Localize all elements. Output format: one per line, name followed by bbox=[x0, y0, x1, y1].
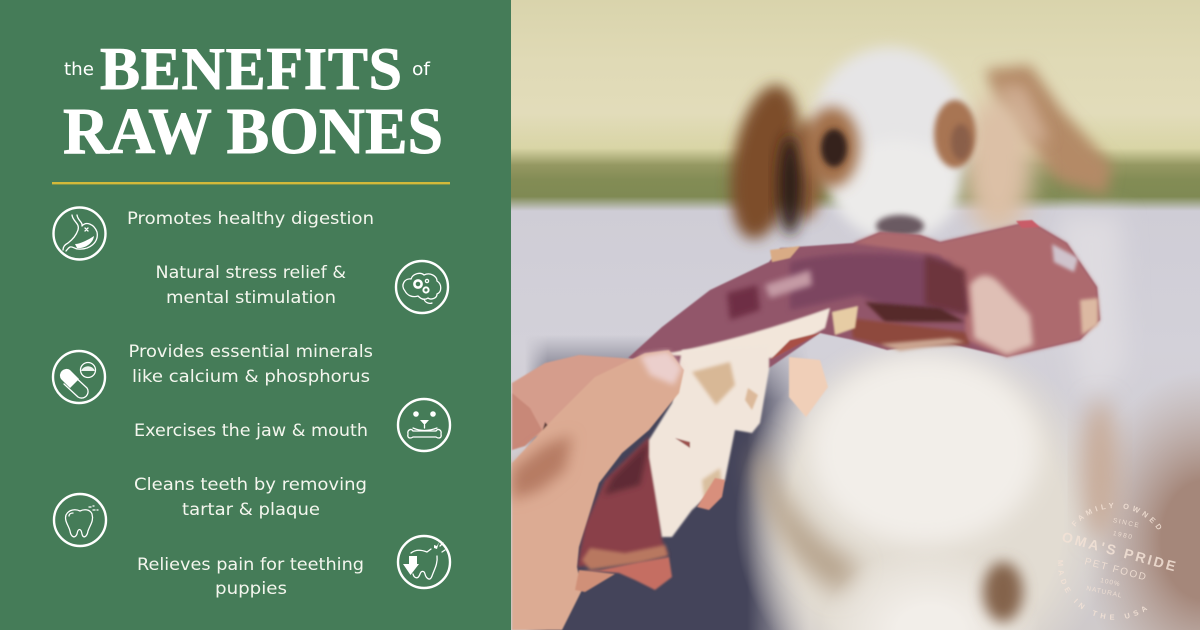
stamp: Oma's Pride logo: SINCE bbox=[1112, 517, 1141, 530]
benefit: clean teeth: tartar & plaque bbox=[182, 500, 320, 520]
benefit: clean teeth bbox=[134, 475, 367, 520]
stamp: Oma's Pride logo: 100% bbox=[1100, 577, 1121, 588]
title: RAW BONES bbox=[63, 95, 443, 168]
raw bone bbox=[577, 220, 1100, 570]
benefit: stress relief bbox=[156, 263, 346, 308]
icon: stomach bbox=[54, 208, 106, 260]
benefit: teething pain: puppies bbox=[215, 579, 287, 599]
hanging bone fragment bbox=[789, 357, 828, 417]
panel: green benefits panel bbox=[0, 0, 511, 630]
benefit: teething pain: Relieves pain for teething bbox=[137, 555, 364, 575]
title: the bbox=[64, 60, 94, 80]
benefit: minerals bbox=[128, 342, 373, 387]
stamp: Oma's Pride logo: OMA'S PRIDE bbox=[1060, 528, 1177, 574]
stamp: Oma's Pride logo bbox=[1058, 502, 1176, 620]
icon: dog with bone bbox=[398, 399, 450, 451]
icon: pill capsule bbox=[53, 351, 105, 403]
blurred dog bbox=[720, 47, 1125, 630]
benefit: clean teeth: Cleans teeth by removing bbox=[134, 475, 367, 495]
panel: photo of dog and raw bone bbox=[511, 0, 1200, 630]
divider line bbox=[52, 182, 450, 184]
benefit: stress relief: Natural stress relief & bbox=[156, 263, 346, 283]
benefit: jaw exercise: Exercises the jaw & mouth bbox=[134, 421, 368, 441]
icon: brain with gears bbox=[396, 261, 448, 313]
hand holding bone bbox=[512, 350, 725, 630]
icon: clean tooth bbox=[54, 494, 106, 546]
benefit: teething pain bbox=[137, 555, 364, 599]
photo background bbox=[511, 0, 1200, 630]
title: of bbox=[412, 60, 431, 80]
benefit: stress relief: mental stimulation bbox=[166, 288, 336, 308]
stamp: Oma's Pride logo: FAMILY OWNED bbox=[1072, 502, 1162, 530]
title: BENEFITS bbox=[100, 36, 402, 102]
stamp: Oma's Pride logo: NATURAL bbox=[1086, 585, 1123, 600]
stamp: Oma's Pride logo: MADE IN THE USA bbox=[1058, 560, 1148, 620]
title bbox=[63, 36, 443, 168]
stamp: Oma's Pride logo: PET FOOD bbox=[1083, 556, 1147, 583]
benefit: minerals: like calcium & phosphorus bbox=[132, 367, 370, 387]
benefit: digestion: Promotes healthy digestion bbox=[127, 209, 374, 229]
stamp: Oma's Pride logo: 1980 bbox=[1112, 530, 1134, 541]
icon: tooth with down arrow bbox=[398, 536, 450, 588]
benefit: minerals: Provides essential minerals bbox=[128, 342, 373, 362]
